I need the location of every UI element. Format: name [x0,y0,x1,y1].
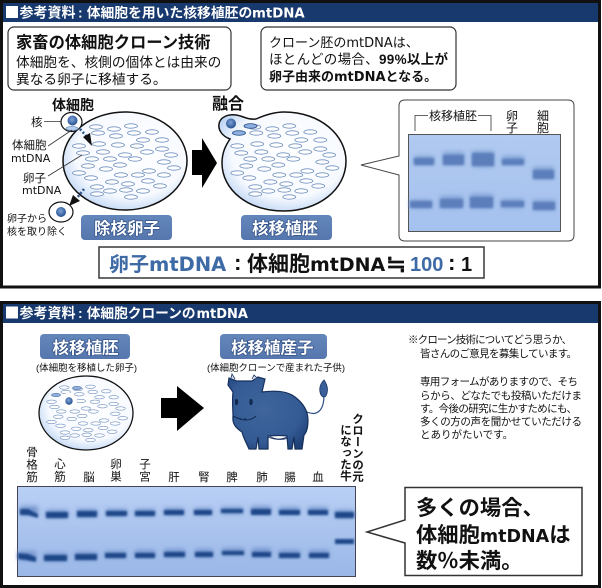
caption: 体細胞を移植した卵子: (体細胞を移植した卵子) [36,362,137,374]
label: 体細胞mtDNA [11,130,72,165]
note text: 専用フォームがありますので、そち [420,375,578,388]
text box: クローン胚のmtDNA: ほとんどの場合、99%以上が [269,51,448,67]
lane labels: 卵 [506,109,518,123]
panel header bar [3,302,598,323]
label: 卵子から核を取り除く: 核を取り除く [7,225,67,238]
label: 体細胞mtDNA: 体細胞 [12,138,47,152]
panel header bar: 体細胞クローンの [87,305,196,321]
face [233,399,256,420]
button: 核移植産子: 核移植産子 [231,338,314,358]
ratio box: 体細胞mtDNA [247,253,386,276]
button: 核移植胚 [40,334,130,359]
label: クローンの元になった牛: になった牛 [339,424,352,482]
lane labels: 核移植胚 [429,108,477,123]
label: 体細胞mtDNA: mtDNA [11,152,51,165]
button: 核移植胚 [241,215,332,240]
ratio box: ≒ [386,244,406,279]
label: 融合: 融合 [212,95,244,113]
label: 卵子mtDNA: 卵子 [23,171,46,185]
lane labels: 胞 [537,121,549,135]
note text: とありがたいです。 [420,428,513,441]
panel header bar: : [78,4,83,20]
diagram: nuclear transfer embryo [219,112,346,211]
note text: す。今後の研究に生かすためにも、 [420,402,577,415]
body [228,377,308,449]
note text: らから、どなたでも投稿いただけま [420,389,582,402]
tissue labels: 骨格筋 [25,446,38,484]
tissue labels: 子宮 [138,458,151,483]
ratio box: 卵子mtDNA [109,253,226,276]
button: 核移植胚: 核移植胚 [52,338,119,358]
tissue labels: 腎 [197,471,209,483]
text box: 家畜の体細胞クローン技術 [8,27,231,90]
removed nucleus [49,202,73,222]
lane labels: 細 [537,108,549,123]
label: 卵子mtDNA [22,155,82,197]
button: 除核卵子 [81,215,172,240]
tissue labels: 卵巣 [109,457,122,483]
ratio box: : [448,250,456,275]
diagram: embryo cell [39,376,133,450]
ratio box [99,244,484,279]
panel header bar: mtDNA [196,307,248,322]
arrow: remove nucleus [69,189,84,206]
ratio box: : [234,250,242,275]
arrow: to offspring [161,386,204,431]
tissue labels: 脾 [225,470,238,483]
fused nucleus and somatic mtDNA [226,118,257,135]
tail [307,380,327,413]
panel header bar: 体細胞を用いた核移植胚の [87,4,252,20]
label: 体細胞: 体細胞 [52,97,94,113]
gel image: tissues [18,486,356,576]
button: 核移植産子 [220,334,327,359]
callout: 多くの場合、体細胞mtDNAは数％未満。 [367,488,582,576]
panel header bar: : [78,305,83,321]
panel header bar: 参考資料 [20,4,76,20]
text box: クローン胚のmtDNA: 卵子由来のmtDNAとなる。 [269,69,437,85]
tissue labels: 腸 [283,471,296,483]
note text: 皆さんのご意見を募集しています。 [420,347,577,360]
button: 除核卵子: 除核卵子 [94,219,160,238]
text box: 家畜の体細胞クローン技術: 体細胞を、核側の個体とは由来の [16,55,221,70]
caption: 体細胞クローンで産まれた子供: (体細胞クローンで産まれた子供) [207,362,345,374]
label: 卵子から核を取り除く [7,212,67,238]
panel header bar [3,2,598,22]
text box: クローン胚のmtDNA: クローン胚のmtDNAは、 [269,35,419,51]
icon: cloned cow [228,374,327,449]
diagram: enucleated egg [49,112,187,222]
text box: 家畜の体細胞クローン技術: 家畜の体細胞クローン技術 [16,33,211,52]
panel: 体細胞を用いた核移植胚のmtDNA [2,2,600,287]
button: 核移植胚: 核移植胚 [252,219,318,238]
arrow: insert somatic cell [80,129,92,146]
gel image [408,134,560,232]
panel header bar: ■ [4,302,20,323]
tissue labels: 肺 [255,471,268,483]
panel: 体細胞クローンのmtDNA [2,302,600,586]
udder [268,435,291,440]
callout: 多くの場合、体細胞mtDNAは数％未満。: 数％未満。 [416,544,522,575]
panel header bar: ■ [4,2,20,22]
label: クローンの元になった牛: クローンの元 [351,413,364,483]
lane labels [415,108,549,135]
note text: ※クローン技術についてどう思うか、 [408,333,572,346]
text box: 家畜の体細胞クローン技術: 異なる卵子に移植する。 [16,71,167,87]
label: 卵子から核を取り除く: 卵子から [7,212,47,225]
label: 核: 核 [31,116,43,129]
somatic cell with nucleus [61,112,82,132]
ratio box: 1 [461,254,472,276]
tissue labels: 血 [311,470,324,482]
horns [231,374,257,379]
callout: 多くの場合、体細胞mtDNAは数％未満。: 多くの場合、 [416,496,544,520]
tissue labels: 肝 [167,471,180,482]
ratio box: 100 [410,254,443,276]
label: 卵子mtDNA: mtDNA [22,184,62,197]
label: 核 [31,116,61,129]
arrow: to embryo [192,138,217,188]
panel header bar: 参考資料 [20,305,76,321]
callout: gel electrophoresis [361,100,574,241]
panel header bar: mtDNA [252,6,305,22]
label: クローンの元になった牛 [339,413,364,483]
tissue labels: 心筋 [53,458,66,483]
tissue labels: 脳 [82,471,95,483]
note text: 多くの方の声を聞かせていただける [420,415,582,428]
text box: クローン胚のmtDNA [261,27,456,90]
lane labels: 子 [506,121,518,135]
note text [408,333,582,441]
tissue labels [25,446,324,484]
callout: 多くの場合、体細胞mtDNAは数％未満。: 体細胞mtDNAは [416,523,571,547]
egg cell [63,112,187,210]
